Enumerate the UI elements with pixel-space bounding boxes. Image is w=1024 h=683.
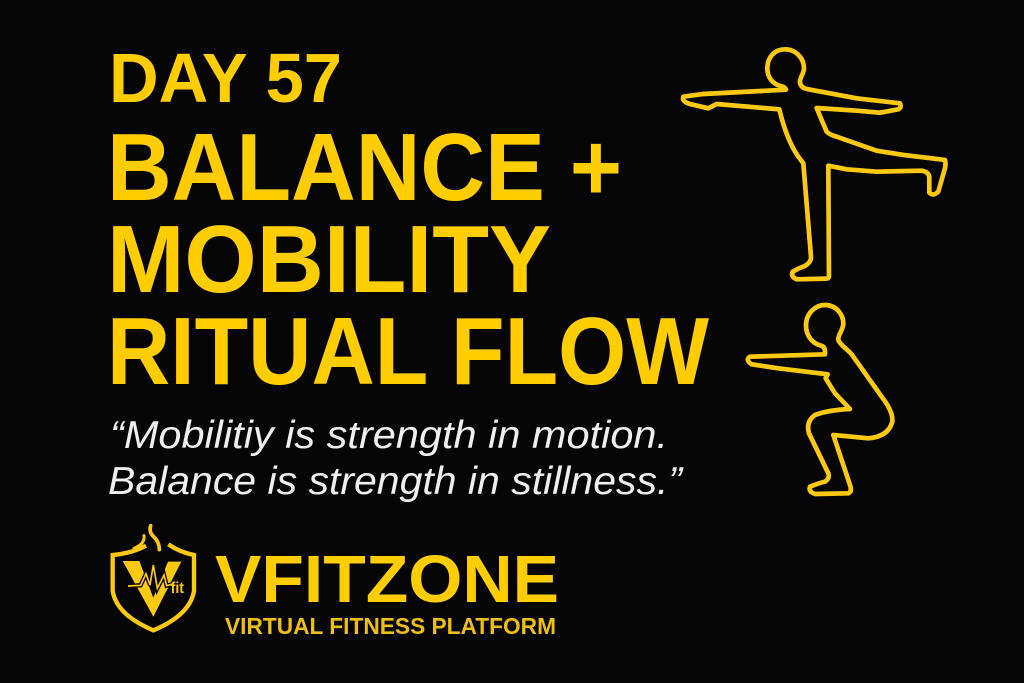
fit letters: fit xyxy=(171,580,184,597)
logo: shield emblem xyxy=(113,526,194,630)
icon: squat pose figure xyxy=(748,305,892,494)
title line 2: MOBILITY xyxy=(107,206,551,313)
V mark xyxy=(123,561,181,617)
heading: workout title xyxy=(107,114,709,405)
shield outline xyxy=(113,544,194,630)
pulse line xyxy=(128,565,174,588)
quote line 2: Balance is strength in stillness.” xyxy=(108,460,684,503)
heading: day number: DAY 57 xyxy=(109,39,342,117)
main flame stroke xyxy=(150,526,159,550)
brand tagline: VIRTUAL FITNESS PLATFORM xyxy=(225,613,556,639)
quote line 1: “Mobilitiy is strength in motion. xyxy=(110,414,668,457)
brand name: VFITZONE xyxy=(215,542,559,617)
icon: balance pose figure xyxy=(683,49,945,279)
quote text xyxy=(108,414,684,503)
left flame stroke xyxy=(134,536,144,548)
flame xyxy=(134,526,159,550)
title line 1: BALANCE + xyxy=(107,114,622,221)
title line 3: RITUAL FLOW xyxy=(107,298,709,405)
